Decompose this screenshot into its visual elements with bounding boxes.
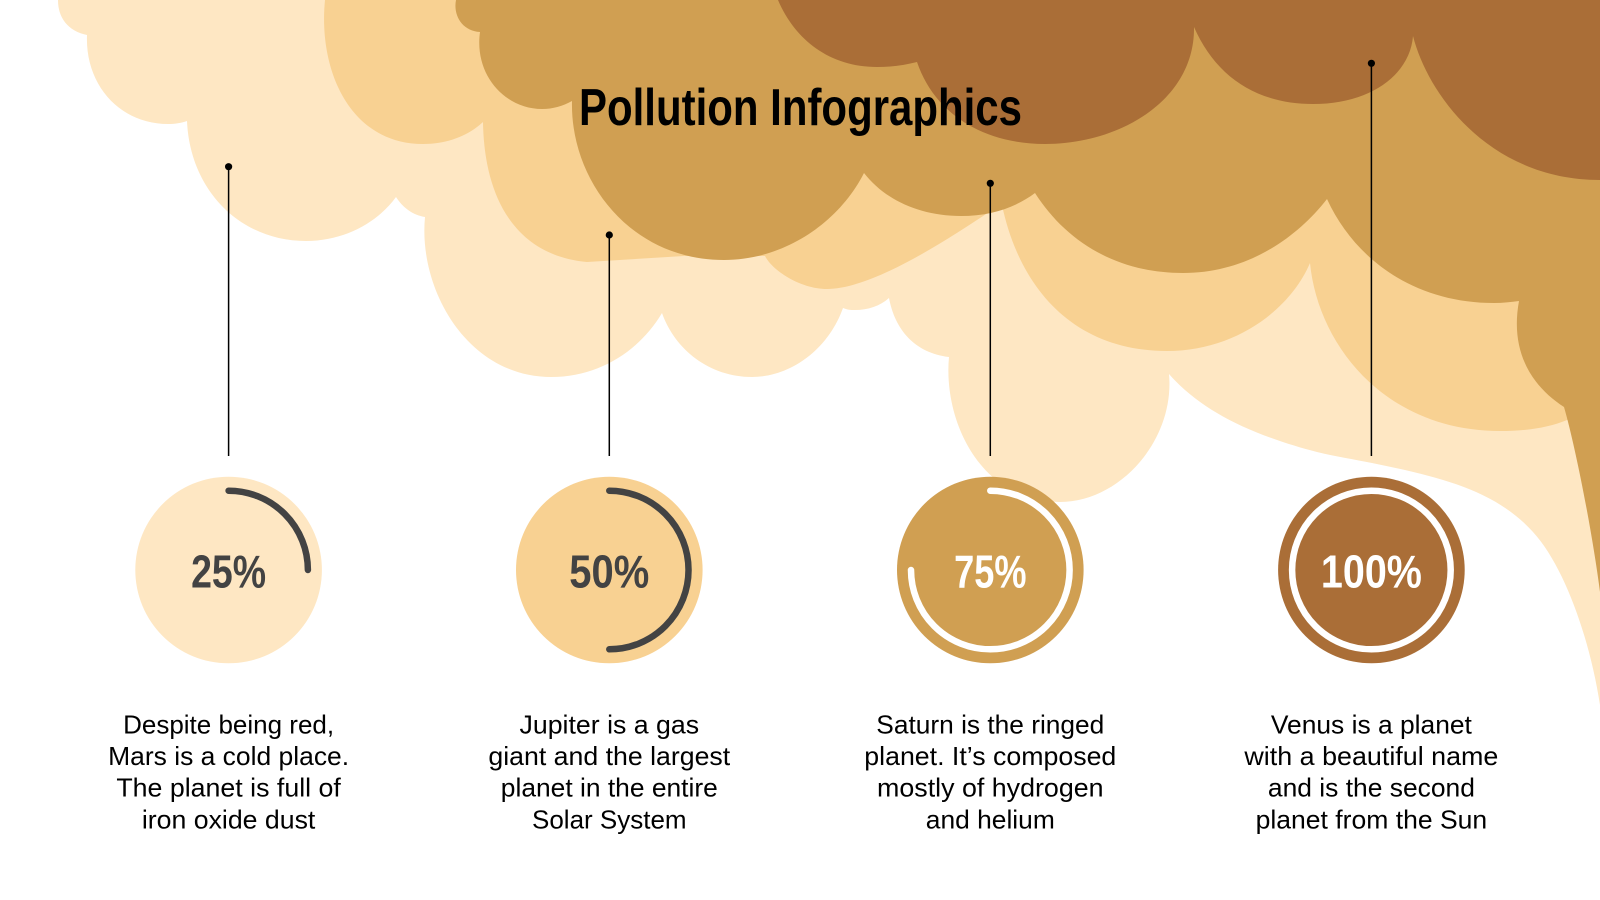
gauge circle <box>897 477 1084 663</box>
description: Venus is a planet <box>1271 709 1473 739</box>
title: Pollution Infographics <box>579 79 1022 137</box>
description: Solar System <box>532 804 687 834</box>
description: The planet is full of <box>116 773 342 803</box>
description: planet from the Sun <box>1256 804 1487 834</box>
percentage value: 100% <box>1321 545 1422 597</box>
cloud layer: tan <box>455 0 1600 592</box>
description <box>488 709 731 834</box>
panel: 100 percent Venus <box>1243 60 1498 834</box>
connector line with dot <box>225 163 232 456</box>
gauge arc 25 percent <box>229 491 308 570</box>
gauge arc 75 percent <box>911 491 1070 649</box>
description: Jupiter is a gas <box>520 709 699 739</box>
percentage value: 25% <box>191 545 266 597</box>
description: with a beautiful name <box>1243 741 1498 771</box>
cloud layer: brown <box>778 0 1600 180</box>
description: iron oxide dust <box>142 804 316 834</box>
description <box>864 709 1116 834</box>
cloud layer: lightest <box>58 0 1600 705</box>
cloud layer: medium <box>324 0 1600 431</box>
gauge circle <box>516 477 703 663</box>
panel: 75 percent Saturn <box>864 180 1116 834</box>
description: giant and the largest <box>488 741 731 771</box>
description: planet. It’s composed <box>864 741 1116 771</box>
description: Despite being red, <box>123 709 334 739</box>
gauge circle <box>135 477 322 663</box>
connector line with dot <box>606 231 613 456</box>
description: planet in the entire <box>501 773 718 803</box>
connector line with dot <box>987 180 994 456</box>
gauge circle <box>1278 477 1465 663</box>
gauge arc 50 percent <box>609 491 689 649</box>
description <box>1243 709 1498 834</box>
description <box>108 709 349 834</box>
panel: 50 percent Jupiter <box>488 231 731 834</box>
description: Mars is a cold place. <box>108 741 349 771</box>
gauge ring 100 percent <box>1292 491 1451 649</box>
percentage value: 75% <box>954 545 1026 597</box>
panel: 25 percent Mars <box>108 163 349 834</box>
description: mostly of hydrogen <box>877 773 1104 803</box>
description: and is the second <box>1268 773 1475 803</box>
description: and helium <box>926 804 1055 834</box>
connector line with dot <box>1368 60 1375 456</box>
percentage value: 50% <box>569 545 649 597</box>
pollution cloud background <box>58 0 1600 705</box>
description: Saturn is the ringed <box>876 709 1104 739</box>
